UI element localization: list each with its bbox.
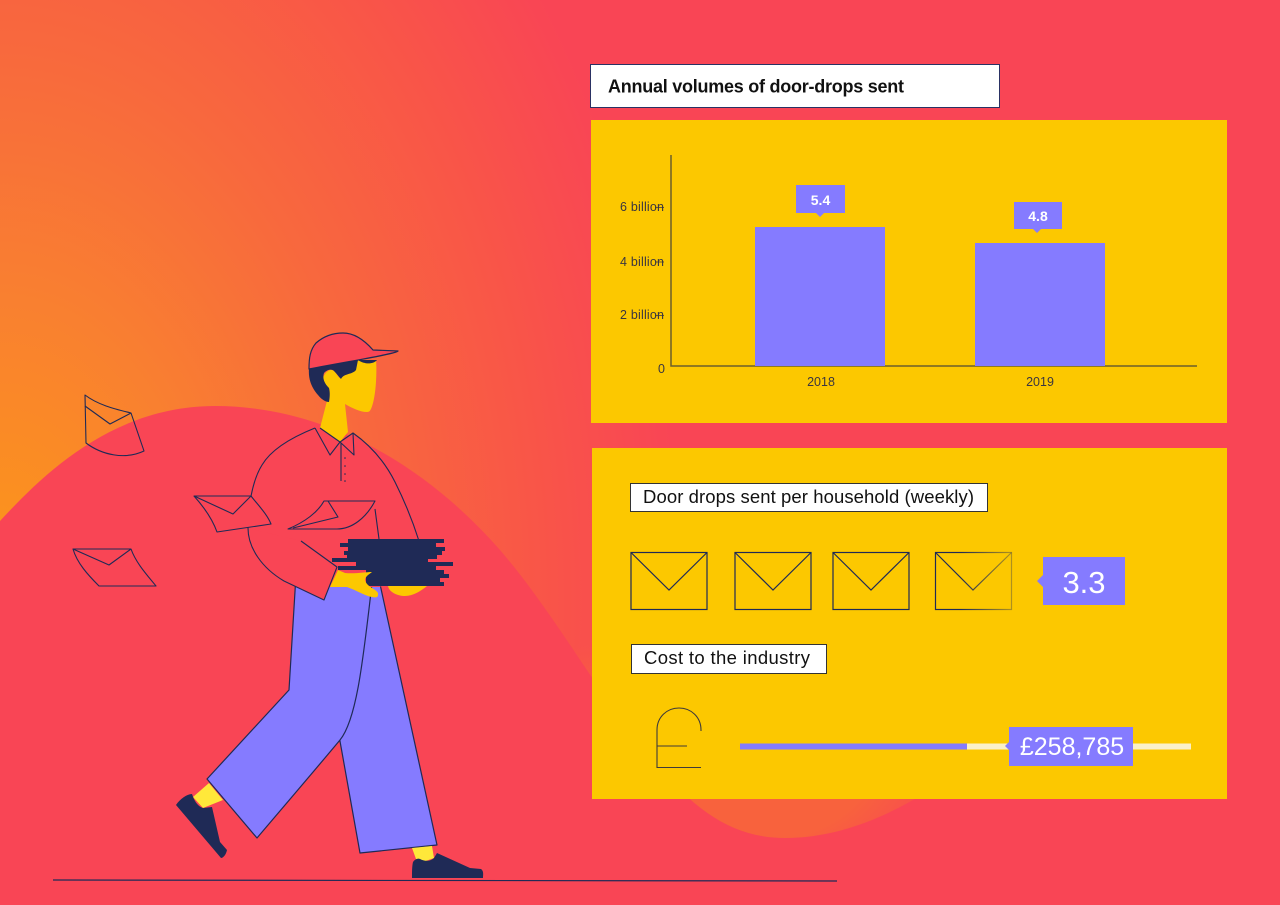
label: cost	[632, 644, 826, 674]
shirt outline	[248, 428, 419, 600]
neck and face	[320, 360, 376, 442]
callout 4.8: 4.8	[1028, 208, 1048, 224]
y axis labels: 2 billion	[620, 308, 664, 322]
y axis labels	[620, 200, 665, 376]
callout 3.3	[1037, 557, 1125, 605]
y axis labels: 4 billion	[620, 255, 664, 269]
icon: pound sign	[657, 708, 701, 768]
shirt body	[248, 428, 419, 587]
sleeve	[248, 528, 337, 600]
back shoe	[176, 794, 227, 858]
cap	[309, 333, 398, 369]
callout 3.3: 3.3	[1062, 565, 1106, 600]
bar 2019	[975, 243, 1105, 366]
parcel stack	[332, 539, 453, 586]
y axis labels: 6 billion	[620, 200, 664, 214]
ground line	[53, 880, 837, 881]
progress bar	[740, 744, 1191, 750]
envelope: flying top left	[85, 395, 144, 456]
envelope 4 partial	[936, 552, 1012, 610]
envelope: flying middle	[194, 496, 271, 532]
hair	[309, 360, 377, 402]
panel: households and cost	[592, 448, 1227, 799]
envelope 2	[735, 552, 811, 610]
socks	[193, 783, 434, 862]
envelope 3	[833, 552, 909, 610]
axes	[671, 155, 1197, 366]
near hand	[330, 570, 378, 597]
red blob shape	[0, 406, 1280, 905]
x axis labels: 2018	[807, 375, 835, 389]
front shoe	[412, 853, 483, 878]
label: cost: Cost to the industry	[644, 647, 811, 668]
front leg trousers	[207, 575, 373, 838]
lower orange glow	[480, 550, 980, 905]
heading: annual volumes	[590, 64, 1000, 108]
bar 2018	[755, 227, 885, 366]
callout cost: £258,785	[1020, 733, 1124, 761]
x axis labels	[807, 375, 1054, 389]
heading: annual volumes: Annual volumes of door-drops sent	[608, 76, 904, 96]
far hand	[388, 586, 427, 596]
callout 5.4	[796, 185, 845, 217]
shirt buttons	[344, 457, 346, 482]
callout cost	[1005, 727, 1133, 766]
y axis labels: 0	[658, 362, 665, 376]
envelope: on chest	[288, 501, 375, 529]
panel: bar chart	[591, 120, 1227, 423]
envelope: flying lower left	[73, 549, 156, 586]
y axis ticks	[655, 208, 664, 316]
callout 5.4: 5.4	[811, 192, 830, 208]
illustration: delivery person	[176, 333, 483, 878]
label: door drops per household: Door drops sent per household (weekly)	[643, 486, 974, 507]
back leg trousers	[338, 575, 437, 853]
x axis labels: 2019	[1026, 375, 1054, 389]
callout 4.8	[1014, 202, 1062, 233]
envelope 1	[631, 552, 707, 610]
label: door drops per household	[630, 484, 988, 512]
